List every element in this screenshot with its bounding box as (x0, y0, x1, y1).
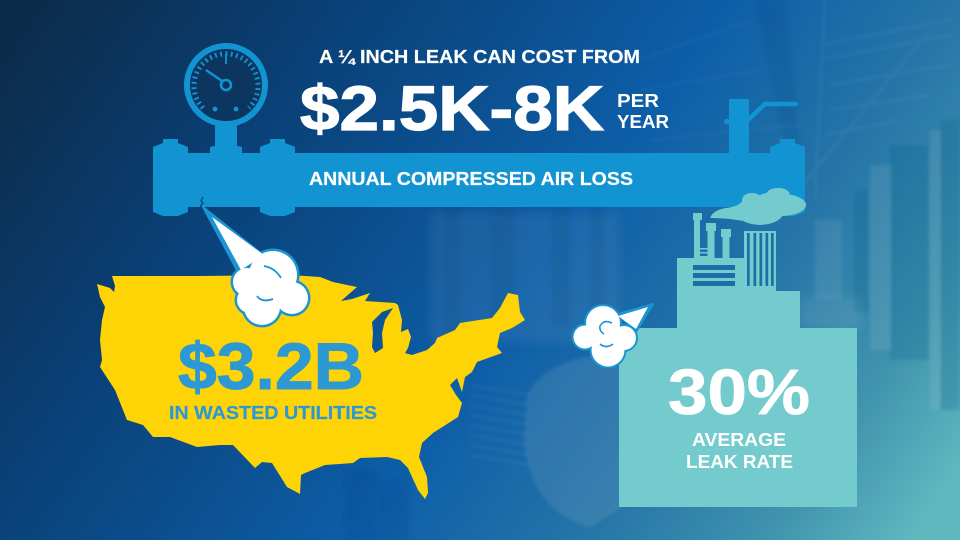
icon: factory smoke (710, 188, 806, 225)
big number: cost range: $2.5K-8K (300, 74, 604, 144)
text: in wasted utilities: IN WASTED UTILITIES (169, 403, 377, 423)
heading: leak cost intro: A ¼ INCH LEAK CAN COST FROM (319, 46, 640, 67)
pipe with flanges and valve (153, 99, 805, 216)
map: continental USA (97, 275, 525, 499)
text: average leak rate (686, 430, 793, 472)
big number: leak rate: 30% (668, 356, 810, 428)
text: per year (617, 91, 669, 132)
icon: crack in pipe (200, 197, 203, 207)
big number: wasted utilities: $3.2B (178, 329, 364, 403)
pipe label: ANNUAL COMPRESSED AIR LOSS (309, 169, 633, 189)
icon: pressure gauge (187, 46, 265, 148)
icon: air leak cloud over map (203, 207, 310, 328)
panel: factory silhouette (619, 213, 857, 507)
text: per year: YEAR (617, 112, 669, 132)
text: average leak rate: LEAK RATE (686, 452, 793, 472)
text: average leak rate: AVERAGE (692, 430, 786, 450)
text: per year: PER (617, 91, 659, 111)
icon: air leak cloud at factory (572, 304, 653, 368)
